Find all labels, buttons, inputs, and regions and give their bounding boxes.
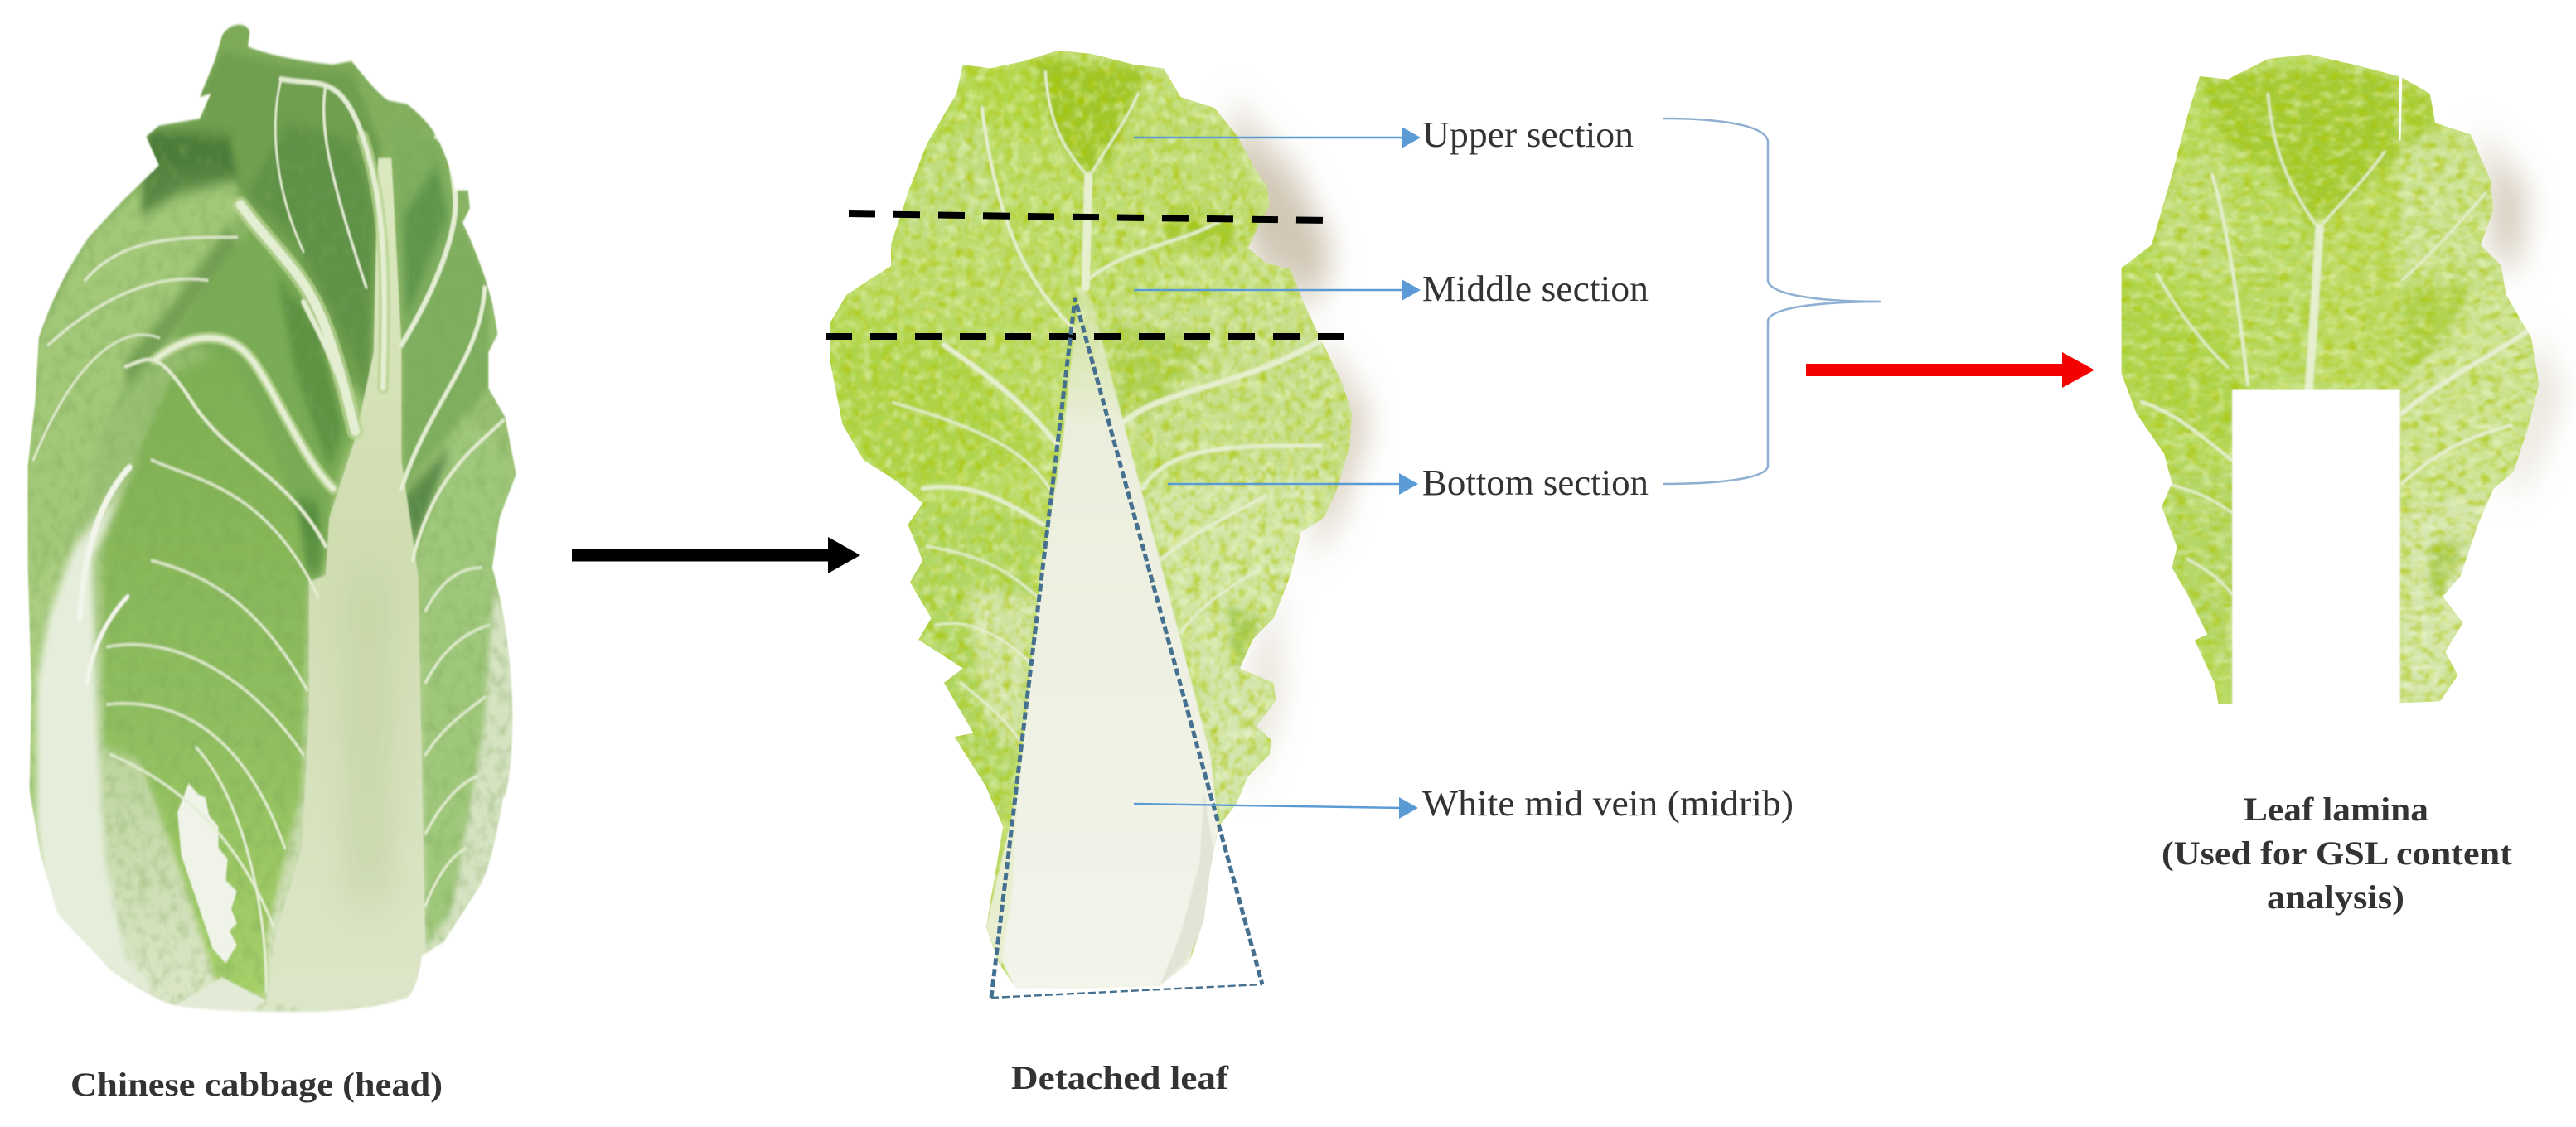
illustration: leaf lamina bbox=[2111, 47, 2562, 716]
central white rib bbox=[266, 158, 425, 1010]
arrow: bottom section bbox=[1168, 473, 1418, 495]
arrow: middle section bbox=[1134, 279, 1421, 301]
dashed section line: middle/bottom bbox=[826, 333, 1349, 340]
caption: Leaf lamina (Used for GSL content analysis): analysis) bbox=[2267, 878, 2404, 916]
leaf cast shadow bbox=[1227, 108, 1375, 791]
arrow: black, cabbage to detached leaf bbox=[572, 537, 860, 573]
lamina cast shadow bbox=[2476, 128, 2562, 501]
vein halo bbox=[155, 137, 385, 489]
caption: Detached leaf: Detached leaf bbox=[1011, 1059, 1229, 1096]
illustration: Chinese cabbage head bbox=[18, 14, 525, 1021]
caption: Leaf lamina (Used for GSL content analysis): (Used for GSL content bbox=[2162, 834, 2513, 872]
arrow: red, to leaf lamina bbox=[1806, 352, 2094, 388]
caption: Leaf lamina (Used for GSL content analysis): Leaf lamina bbox=[2244, 791, 2428, 828]
dashed triangle: midrib outline bbox=[991, 298, 1262, 998]
label: White mid vein (midrib): White mid vein (midrib) bbox=[1422, 783, 1794, 824]
label: Upper section: Upper section bbox=[1422, 114, 1634, 155]
arrow: white mid vein bbox=[1134, 797, 1418, 819]
label: Middle section: Middle section bbox=[1422, 268, 1649, 309]
arrow: upper section bbox=[1134, 127, 1421, 148]
illustration: detached leaf bbox=[821, 43, 1375, 999]
label: Bottom section: Bottom section bbox=[1422, 462, 1649, 503]
white midrib bbox=[986, 288, 1218, 990]
white gap between leaves bbox=[177, 783, 237, 963]
brace: sections grouped bbox=[1663, 119, 1881, 484]
left pale leaf base bbox=[37, 446, 167, 1006]
caption: Chinese cabbage (head): Chinese cabbage (head) bbox=[70, 1066, 443, 1103]
caption: Leaf lamina (Used for GSL content analysis) bbox=[2162, 791, 2513, 916]
dashed section line: upper/middle bbox=[849, 214, 1327, 220]
